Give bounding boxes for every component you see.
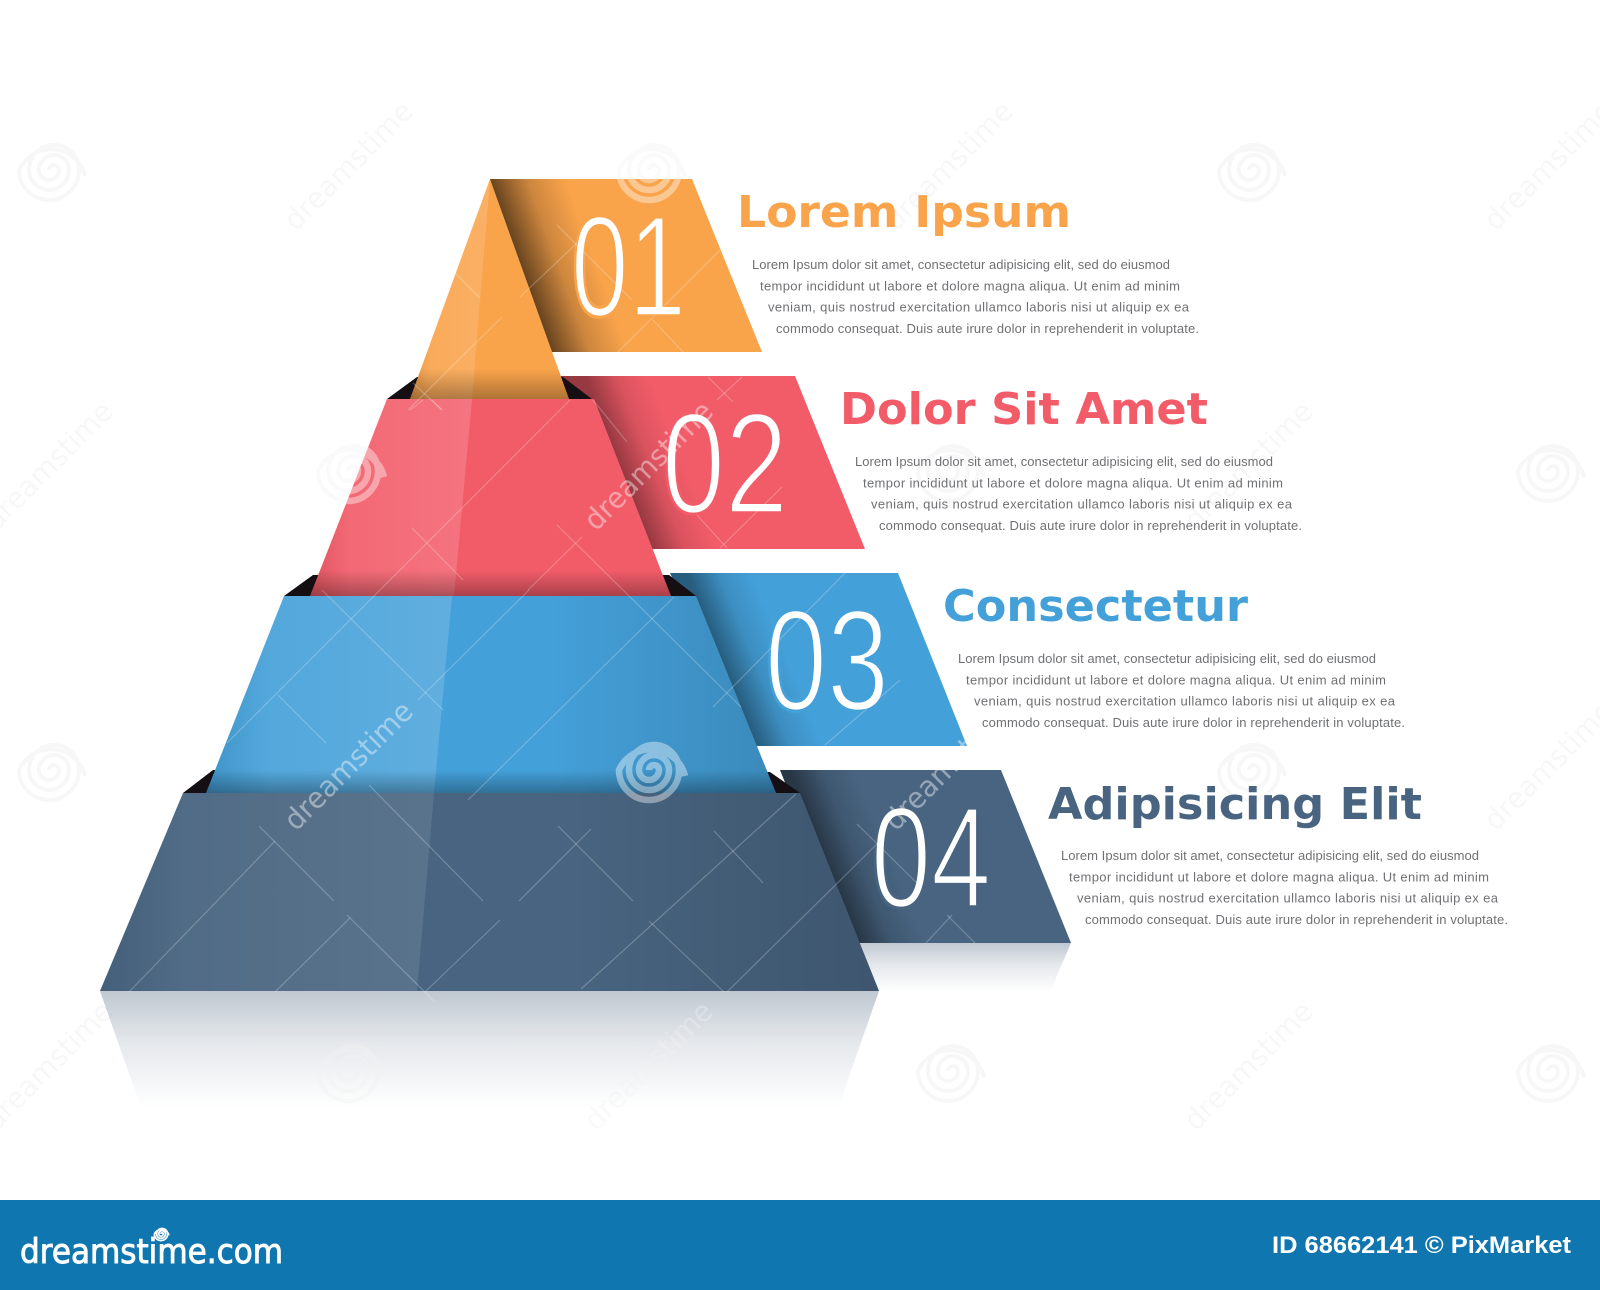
watermark layer on white: dreamstime bbox=[277, 94, 420, 237]
footer image id: ID 68662141 © PixMarket bbox=[1272, 1232, 1571, 1259]
watermark layer on white: dreamstime bbox=[577, 994, 720, 1137]
text block 1: tempor incididunt ut labore et dolore magna aliqua. Ut enim ad minim bbox=[760, 278, 1180, 294]
pyramid tier 1 bbox=[410, 179, 569, 399]
text block 3: veniam, quis nostrud exercitation ullamco laboris nisi ut aliquip ex ea bbox=[974, 694, 1396, 708]
text block 4: commodo consequat. Duis aute irure dolor in reprehenderit in voluptate. bbox=[1085, 912, 1508, 927]
watermark layer over the pyramid: dreamstime bbox=[277, 694, 420, 837]
text block 3: Lorem Ipsum dolor sit amet, consectetur adipisicing elit, sed do eiusmod bbox=[958, 651, 1376, 666]
heading: Adipisicing Elit: Adipisicing Elit bbox=[1048, 779, 1422, 830]
tab 01 bbox=[490, 179, 762, 352]
text block 2: Lorem Ipsum dolor sit amet, consectetur adipisicing elit, sed do eiusmod bbox=[855, 454, 1273, 469]
watermark layer over the pyramid bbox=[129, 145, 1020, 1002]
heading: Consectetur: Consectetur bbox=[943, 581, 1248, 632]
tab 04 bbox=[780, 770, 1071, 943]
watermark layer over the pyramid: dreamstime bbox=[577, 394, 720, 537]
text block 4 bbox=[1061, 848, 1508, 927]
tab 02 bbox=[555, 376, 865, 549]
text block 4: Lorem Ipsum dolor sit amet, consectetur adipisicing elit, sed do eiusmod bbox=[1061, 848, 1479, 863]
pyramid floor reflection: dreamstime bbox=[577, 994, 720, 1137]
watermark layer on white: dreamstime bbox=[1177, 394, 1320, 537]
footer banner bbox=[0, 1200, 1600, 1290]
number 03: 03 bbox=[765, 580, 889, 741]
tab 03 bbox=[670, 573, 967, 746]
watermark layer over the pyramid: dreamstime bbox=[877, 694, 1020, 837]
pyramid tier 2 bbox=[310, 399, 671, 596]
text block 2 bbox=[855, 454, 1302, 533]
text block 2: tempor incididunt ut labore et dolore magna aliqua. Ut enim ad minim bbox=[863, 476, 1283, 490]
text block 3 bbox=[958, 651, 1405, 730]
heading: Dolor Sit Amet: Dolor Sit Amet bbox=[840, 384, 1208, 435]
watermark layer on white: dreamstime bbox=[877, 94, 1020, 237]
pyramid tier 4 bbox=[100, 793, 879, 991]
text block 2: veniam, quis nostrud exercitation ullamco laboris nisi ut aliquip ex ea bbox=[871, 496, 1293, 512]
text block 1 bbox=[752, 257, 1199, 336]
number 02: 02 bbox=[662, 383, 788, 544]
text block 4: veniam, quis nostrud exercitation ullamco laboris nisi ut aliquip ex ea bbox=[1077, 890, 1499, 906]
pyramid tier 3 bbox=[206, 596, 776, 793]
text block 1: veniam, quis nostrud exercitation ullamco laboris nisi ut aliquip ex ea bbox=[768, 300, 1190, 314]
footer logo: dreamstime.com bbox=[20, 1232, 283, 1272]
text block 3: tempor incididunt ut labore et dolore magna aliqua. Ut enim ad minim bbox=[966, 672, 1386, 688]
heading: Lorem Ipsum: Lorem Ipsum bbox=[737, 187, 1071, 238]
text block 4: tempor incididunt ut labore et dolore magna aliqua. Ut enim ad minim bbox=[1069, 870, 1489, 884]
dark gaps between pyramid tiers bbox=[183, 377, 800, 793]
watermark layer on white: dreamstime bbox=[1177, 994, 1320, 1137]
text block 1: commodo consequat. Duis aute irure dolor in reprehenderit in voluptate. bbox=[776, 321, 1199, 336]
text block 1: Lorem Ipsum dolor sit amet, consectetur adipisicing elit, sed do eiusmod bbox=[752, 257, 1170, 272]
text block 2: commodo consequat. Duis aute irure dolor in reprehenderit in voluptate. bbox=[879, 518, 1302, 533]
text block 3: commodo consequat. Duis aute irure dolor in reprehenderit in voluptate. bbox=[982, 715, 1405, 730]
number 04: 04 bbox=[871, 777, 991, 938]
pyramid floor reflection bbox=[100, 943, 1071, 1137]
number 01: 01 bbox=[571, 186, 686, 347]
